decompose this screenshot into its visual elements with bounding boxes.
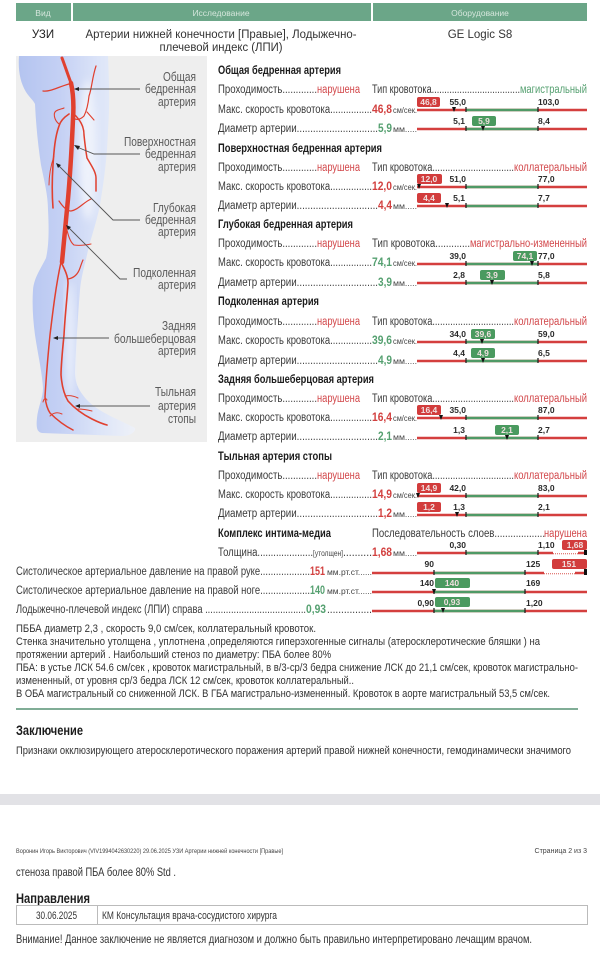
text block: conclusion continued: стеноза правой ПБА более 80% Std . xyxy=(16,865,176,879)
panel: dorsal foot artery: нарушена xyxy=(317,470,360,482)
scale: index 0,93: 0,93 xyxy=(444,597,461,607)
panel: deep femoral artery: мм..... xyxy=(393,279,417,288)
row: systolic pressure, right leg: Систолическое артериальное давление на правой ноге................... xyxy=(16,585,310,597)
row: ankle-brachial index: Лодыжечно-плечевой индекс (ЛПИ) справа ....................................... xyxy=(16,604,306,616)
panel: deep femoral artery: Глубокая бедренная артерия xyxy=(218,219,353,231)
page break band xyxy=(0,794,600,805)
panel: intima-media complex: мм..... xyxy=(393,549,417,558)
scale: speed 74,1: 77,0 xyxy=(538,251,555,261)
table: referrals: КМ Консультация врача-сосудистого хирурга xyxy=(102,910,278,922)
panel: superficial femoral artery: 4,4 xyxy=(378,198,392,212)
scale: speed 74,1: 39,0 xyxy=(449,251,466,261)
panel: common femoral artery: Тип кровотока................................... xyxy=(372,84,520,96)
panel: popliteal artery: Тип кровотока................................ xyxy=(372,316,514,328)
scale: speed 12,0: 51,0 xyxy=(449,174,466,184)
panel: deep femoral artery: Тип кровотока............. xyxy=(372,238,470,250)
panel: dorsal foot artery: Тыльная артерия стопы xyxy=(218,451,332,463)
panel: superficial femoral artery: Макс. скорость кровотока................ xyxy=(218,181,372,193)
scale: speed 39,6: 39,6 xyxy=(475,329,492,339)
panel: popliteal artery: см/сек. xyxy=(393,337,417,346)
panel: dorsal foot artery: Диаметр артерии.............................. xyxy=(218,508,378,520)
panel: posterior tibial artery: мм..... xyxy=(393,433,417,442)
panel: superficial femoral artery: Диаметр артерии.............................. xyxy=(218,200,378,212)
label: deep femoral artery: бедренная xyxy=(145,213,196,227)
panel: leg anatomy illustration xyxy=(16,56,207,442)
panel: posterior tibial artery: см/сек. xyxy=(393,414,417,423)
panel: intima-media complex: Толщина..................... xyxy=(218,547,313,559)
scale: diameter 2,1: 1,3 xyxy=(453,425,465,435)
panel: common femoral artery: нарушена xyxy=(317,84,360,96)
panel: deep femoral artery xyxy=(218,219,587,289)
panel: dorsal foot artery xyxy=(218,451,587,520)
scale: diameter 2,1: 2,1 xyxy=(501,425,513,435)
panel: common femoral artery: Проходимость............. xyxy=(218,84,317,96)
row: systolic pressure, right arm: Систолическое артериальное давление на правой руке................... xyxy=(16,566,310,578)
icon: leg silhouette with arteries xyxy=(19,56,135,436)
scale: speed 16,4: 16,4 xyxy=(421,405,438,415)
row: systolic pressure, right arm xyxy=(16,559,587,578)
scale: speed 16,4: 87,0 xyxy=(538,405,555,415)
scale: diameter 1,2 xyxy=(417,502,587,517)
scale: diameter 5,9: 5,9 xyxy=(478,116,490,126)
scale: speed 46,8: 103,0 xyxy=(538,97,560,107)
panel: posterior tibial artery: Задняя большеберцовая артерия xyxy=(218,374,374,386)
panel: popliteal artery: Макс. скорость кровотока................ xyxy=(218,335,372,347)
label: deep femoral artery: Глубокая xyxy=(153,201,196,215)
panel: posterior tibial artery: Диаметр артерии.............................. xyxy=(218,431,378,443)
panel: popliteal artery: Проходимость............. xyxy=(218,316,317,328)
panel: common femoral artery: Общая бедренная артерия xyxy=(218,65,341,77)
scale: diameter 5,9 xyxy=(417,116,587,131)
row: systolic pressure, right leg xyxy=(16,578,587,597)
table header: columns: Исследование xyxy=(192,8,250,18)
panel: deep femoral artery: нарушена xyxy=(317,238,360,250)
scale: thickness 1,68 xyxy=(417,540,587,555)
scale: diameter 2,1: 2,7 xyxy=(538,425,550,435)
scale: diameter 5,9: 8,4 xyxy=(538,116,550,126)
table row: exam information: плечевой индекс (ЛПИ) xyxy=(160,42,283,54)
label: posterior tibial artery xyxy=(53,319,196,358)
scale: speed 14,9: 42,0 xyxy=(449,483,466,493)
heading: referrals: Направления xyxy=(16,890,90,906)
label: common femoral artery: Общая xyxy=(163,70,196,84)
label: posterior tibial artery: большеберцовая xyxy=(114,332,196,346)
panel: common femoral artery: 46,8 xyxy=(372,102,392,116)
scale: leg pressure 140: 140 xyxy=(420,578,434,588)
table row: exam information: Артерии нижней конечности [Правые], Лодыжечно- xyxy=(86,29,357,41)
page header: Страница 2 из 3 xyxy=(535,848,587,855)
scale: diameter 4,9: 4,4 xyxy=(453,348,465,358)
page header: Воронин Игорь Викторович (VIV1994042630220) 29.06.2025 УЗИ Артерии нижней конечности [Правые] xyxy=(16,848,283,855)
panel: deep femoral artery: Макс. скорость кровотока................ xyxy=(218,257,372,269)
scale: thickness 1,68: 1,10 xyxy=(538,540,555,550)
panel: superficial femoral artery: Проходимость............. xyxy=(218,162,317,174)
panel: posterior tibial artery: Тип кровотока................................ xyxy=(372,393,514,405)
table: referrals: 30.06.2025 xyxy=(36,910,77,922)
scale: diameter 5,9: 5,1 xyxy=(453,116,465,126)
panel: dorsal foot artery: 14,9 xyxy=(372,487,392,501)
panel: popliteal artery: 4,9 xyxy=(378,353,392,367)
panel: posterior tibial artery: Макс. скорость кровотока................ xyxy=(218,412,372,424)
panel: posterior tibial artery: 16,4 xyxy=(372,410,392,424)
panel: dorsal foot artery: см/сек. xyxy=(393,491,417,500)
row: systolic pressure, right leg: мм.рт.ст...... xyxy=(327,587,372,596)
label: superficial femoral artery: бедренная xyxy=(145,147,196,161)
scale: speed 12,0: 12,0 xyxy=(421,174,438,184)
text block: findings: протяжении артерий . Наибольший стеноз по диаметру: ПБА более 80% xyxy=(16,649,331,661)
row: ankle-brachial index xyxy=(16,597,587,616)
scale: speed 39,6: 34,0 xyxy=(449,329,466,339)
scale: diameter 4,9: 6,5 xyxy=(538,348,550,358)
scale: speed 14,9 xyxy=(416,483,587,498)
label: dorsal foot artery: артерия xyxy=(158,399,196,413)
label: superficial femoral artery: Поверхностная xyxy=(124,135,196,149)
table row: exam information: GE Logic S8 xyxy=(448,29,512,41)
scale: speed 16,4: 35,0 xyxy=(449,405,466,415)
scale: diameter 1,2: 1,3 xyxy=(453,502,465,512)
scale: arm pressure 151: 90 xyxy=(425,559,434,569)
panel: posterior tibial artery xyxy=(218,374,587,443)
scale: diameter 4,9: 4,9 xyxy=(477,348,489,358)
scale: speed 39,6: 59,0 xyxy=(538,329,555,339)
table header: columns: Вид xyxy=(35,8,51,18)
panel: intima-media complex: 1,68 xyxy=(372,545,392,559)
scale: leg pressure 140: 169 xyxy=(526,578,540,588)
scale: thickness 1,68: 1,68 xyxy=(567,540,584,550)
scale: arm pressure 151: 125 xyxy=(526,559,540,569)
label: dorsal foot artery: Тыльная xyxy=(155,385,196,399)
scale: diameter 3,9: 2,8 xyxy=(453,270,465,280)
scale: index 0,93: 0,90 xyxy=(417,598,434,608)
table header: columns: Оборудование xyxy=(451,8,509,18)
scale: diameter 2,1 xyxy=(417,425,587,440)
table row: exam information xyxy=(32,29,512,54)
scale: speed 12,0: 77,0 xyxy=(538,174,555,184)
scale: speed 46,8: 55,0 xyxy=(449,97,466,107)
row: systolic pressure, right arm: 151 xyxy=(310,564,325,578)
label: common femoral artery: бедренная xyxy=(145,82,196,96)
scale: diameter 4,9 xyxy=(417,348,587,363)
label: common femoral artery xyxy=(74,70,196,109)
row: ankle-brachial index: ................ xyxy=(327,604,372,616)
label: popliteal artery xyxy=(66,225,196,292)
panel: superficial femoral artery: мм..... xyxy=(393,202,417,211)
panel: popliteal artery: Диаметр артерии.............................. xyxy=(218,355,378,367)
panel: superficial femoral artery xyxy=(218,143,587,212)
page header xyxy=(16,848,587,855)
scale: speed 12,0 xyxy=(417,174,587,189)
label: common femoral artery: артерия xyxy=(158,95,196,109)
scale: index 0,93: 1,20 xyxy=(526,598,543,608)
panel: deep femoral artery: 74,1 xyxy=(372,255,392,269)
panel: superficial femoral artery: Тип кровотока................................ xyxy=(372,162,514,174)
label: popliteal artery: артерия xyxy=(158,278,196,292)
label: popliteal artery: Подколенная xyxy=(133,266,196,280)
scale: speed 14,9: 14,9 xyxy=(421,483,438,493)
panel: deep femoral artery: Диаметр артерии.............................. xyxy=(218,277,378,289)
scale: arm pressure 151: 151 xyxy=(562,559,576,569)
panel: deep femoral artery: Проходимость............. xyxy=(218,238,317,250)
scale: diameter 4,4: 7,7 xyxy=(538,193,550,203)
text block: findings xyxy=(16,623,578,700)
scale: speed 14,9: 83,0 xyxy=(538,483,555,493)
panel: intima-media complex: Последовательность слоев................... xyxy=(372,528,545,540)
scale: leg pressure 140: 140 xyxy=(445,578,459,588)
scale: speed 16,4 xyxy=(417,405,587,420)
panel: popliteal artery: 39,6 xyxy=(372,333,392,347)
panel: common femoral artery: мм..... xyxy=(393,125,417,134)
label: deep femoral artery xyxy=(56,163,196,239)
label: posterior tibial artery: Задняя xyxy=(162,319,196,333)
panel: dorsal foot artery: Макс. скорость кровотока................ xyxy=(218,489,372,501)
row: systolic pressure, right arm: мм.рт.ст...... xyxy=(327,568,372,577)
table header: columns xyxy=(16,3,587,21)
scale: diameter 3,9 xyxy=(417,270,587,285)
text block: findings: измененный, от уровня ср/3 бедра ЛСК 12 см/сек, кровоток коллатеральный.. xyxy=(16,675,354,687)
label: dorsal foot artery xyxy=(75,385,196,426)
table row: exam information: УЗИ xyxy=(32,29,54,41)
row: systolic pressure, right leg: 140 xyxy=(310,583,325,597)
scale: speed 39,6 xyxy=(417,329,587,344)
scale: index 0,93 xyxy=(372,597,587,613)
panel: superficial femoral artery: 12,0 xyxy=(372,179,392,193)
panel: superficial femoral artery: нарушена xyxy=(317,162,360,174)
panel: superficial femoral artery: см/сек. xyxy=(393,183,417,192)
scale: thickness 1,68: 0,30 xyxy=(449,540,466,550)
scale: diameter 3,9: 3,9 xyxy=(486,270,498,280)
label: superficial femoral artery: артерия xyxy=(158,160,196,174)
panel: popliteal artery: Подколенная артерия xyxy=(218,296,319,308)
panel: dorsal foot artery: Тип кровотока................................ xyxy=(372,470,514,482)
panel: common femoral artery: см/сек. xyxy=(393,106,417,115)
panel: common femoral artery xyxy=(218,65,587,135)
table: referrals xyxy=(16,906,588,924)
panel: dorsal foot artery: мм..... xyxy=(393,510,417,519)
panel: posterior tibial artery: Проходимость............. xyxy=(218,393,317,405)
panel: common femoral artery: Диаметр артерии.............................. xyxy=(218,123,378,135)
panel: common femoral artery: Макс. скорость кровотока................ xyxy=(218,104,372,116)
label: superficial femoral artery xyxy=(74,135,196,174)
scale: speed 46,8: 46,8 xyxy=(420,97,437,107)
panel: deep femoral artery: 3,9 xyxy=(378,275,392,289)
panel: dorsal foot artery: 1,2 xyxy=(378,506,392,520)
panel: common femoral artery: 5,9 xyxy=(378,121,392,135)
panel: deep femoral artery: см/сек. xyxy=(393,259,417,268)
row: ankle-brachial index: 0,93 xyxy=(306,602,326,616)
scale: leg pressure 140 xyxy=(372,578,587,594)
scale: speed 46,8 xyxy=(417,97,587,112)
text block: findings: ПББА диаметр 2,3 , скорость 9,0 см/сек, коллатеральный кровоток. xyxy=(16,623,316,635)
panel: intima-media complex: [утолщен] xyxy=(313,549,343,558)
scale: speed 74,1 xyxy=(417,251,587,266)
scale: diameter 4,4 xyxy=(417,193,587,208)
panel: intima-media complex xyxy=(218,528,587,559)
panel: superficial femoral artery: Поверхностная бедренная артерия xyxy=(218,143,382,155)
panel: intima-media complex: Комплекс интима-медиа xyxy=(218,528,331,540)
scale: arm pressure 151 xyxy=(372,559,587,575)
panel: intima-media complex: .......... xyxy=(343,547,372,559)
label: deep femoral artery: артерия xyxy=(158,225,196,239)
heading: conclusion: Заключение xyxy=(16,723,83,738)
panel: posterior tibial artery: нарушена xyxy=(317,393,360,405)
scale: diameter 4,4: 4,4 xyxy=(423,193,435,203)
label: dorsal foot artery: стопы xyxy=(168,412,196,426)
panel: popliteal artery: нарушена xyxy=(317,316,360,328)
scale: diameter 1,2: 2,1 xyxy=(538,502,550,512)
panel: posterior tibial artery: 2,1 xyxy=(378,429,392,443)
scale: diameter 1,2: 1,2 xyxy=(423,502,435,512)
label: posterior tibial artery: артерия xyxy=(158,344,196,358)
scale: diameter 3,9: 5,8 xyxy=(538,270,550,280)
scale: speed 74,1: 74,1 xyxy=(517,251,534,261)
panel: popliteal artery xyxy=(218,296,587,367)
panel: dorsal foot artery: Проходимость............. xyxy=(218,470,317,482)
panel: popliteal artery: мм..... xyxy=(393,357,417,366)
scale: diameter 4,4: 5,1 xyxy=(453,193,465,203)
panel: intima-media complex: нарушена xyxy=(544,528,587,540)
